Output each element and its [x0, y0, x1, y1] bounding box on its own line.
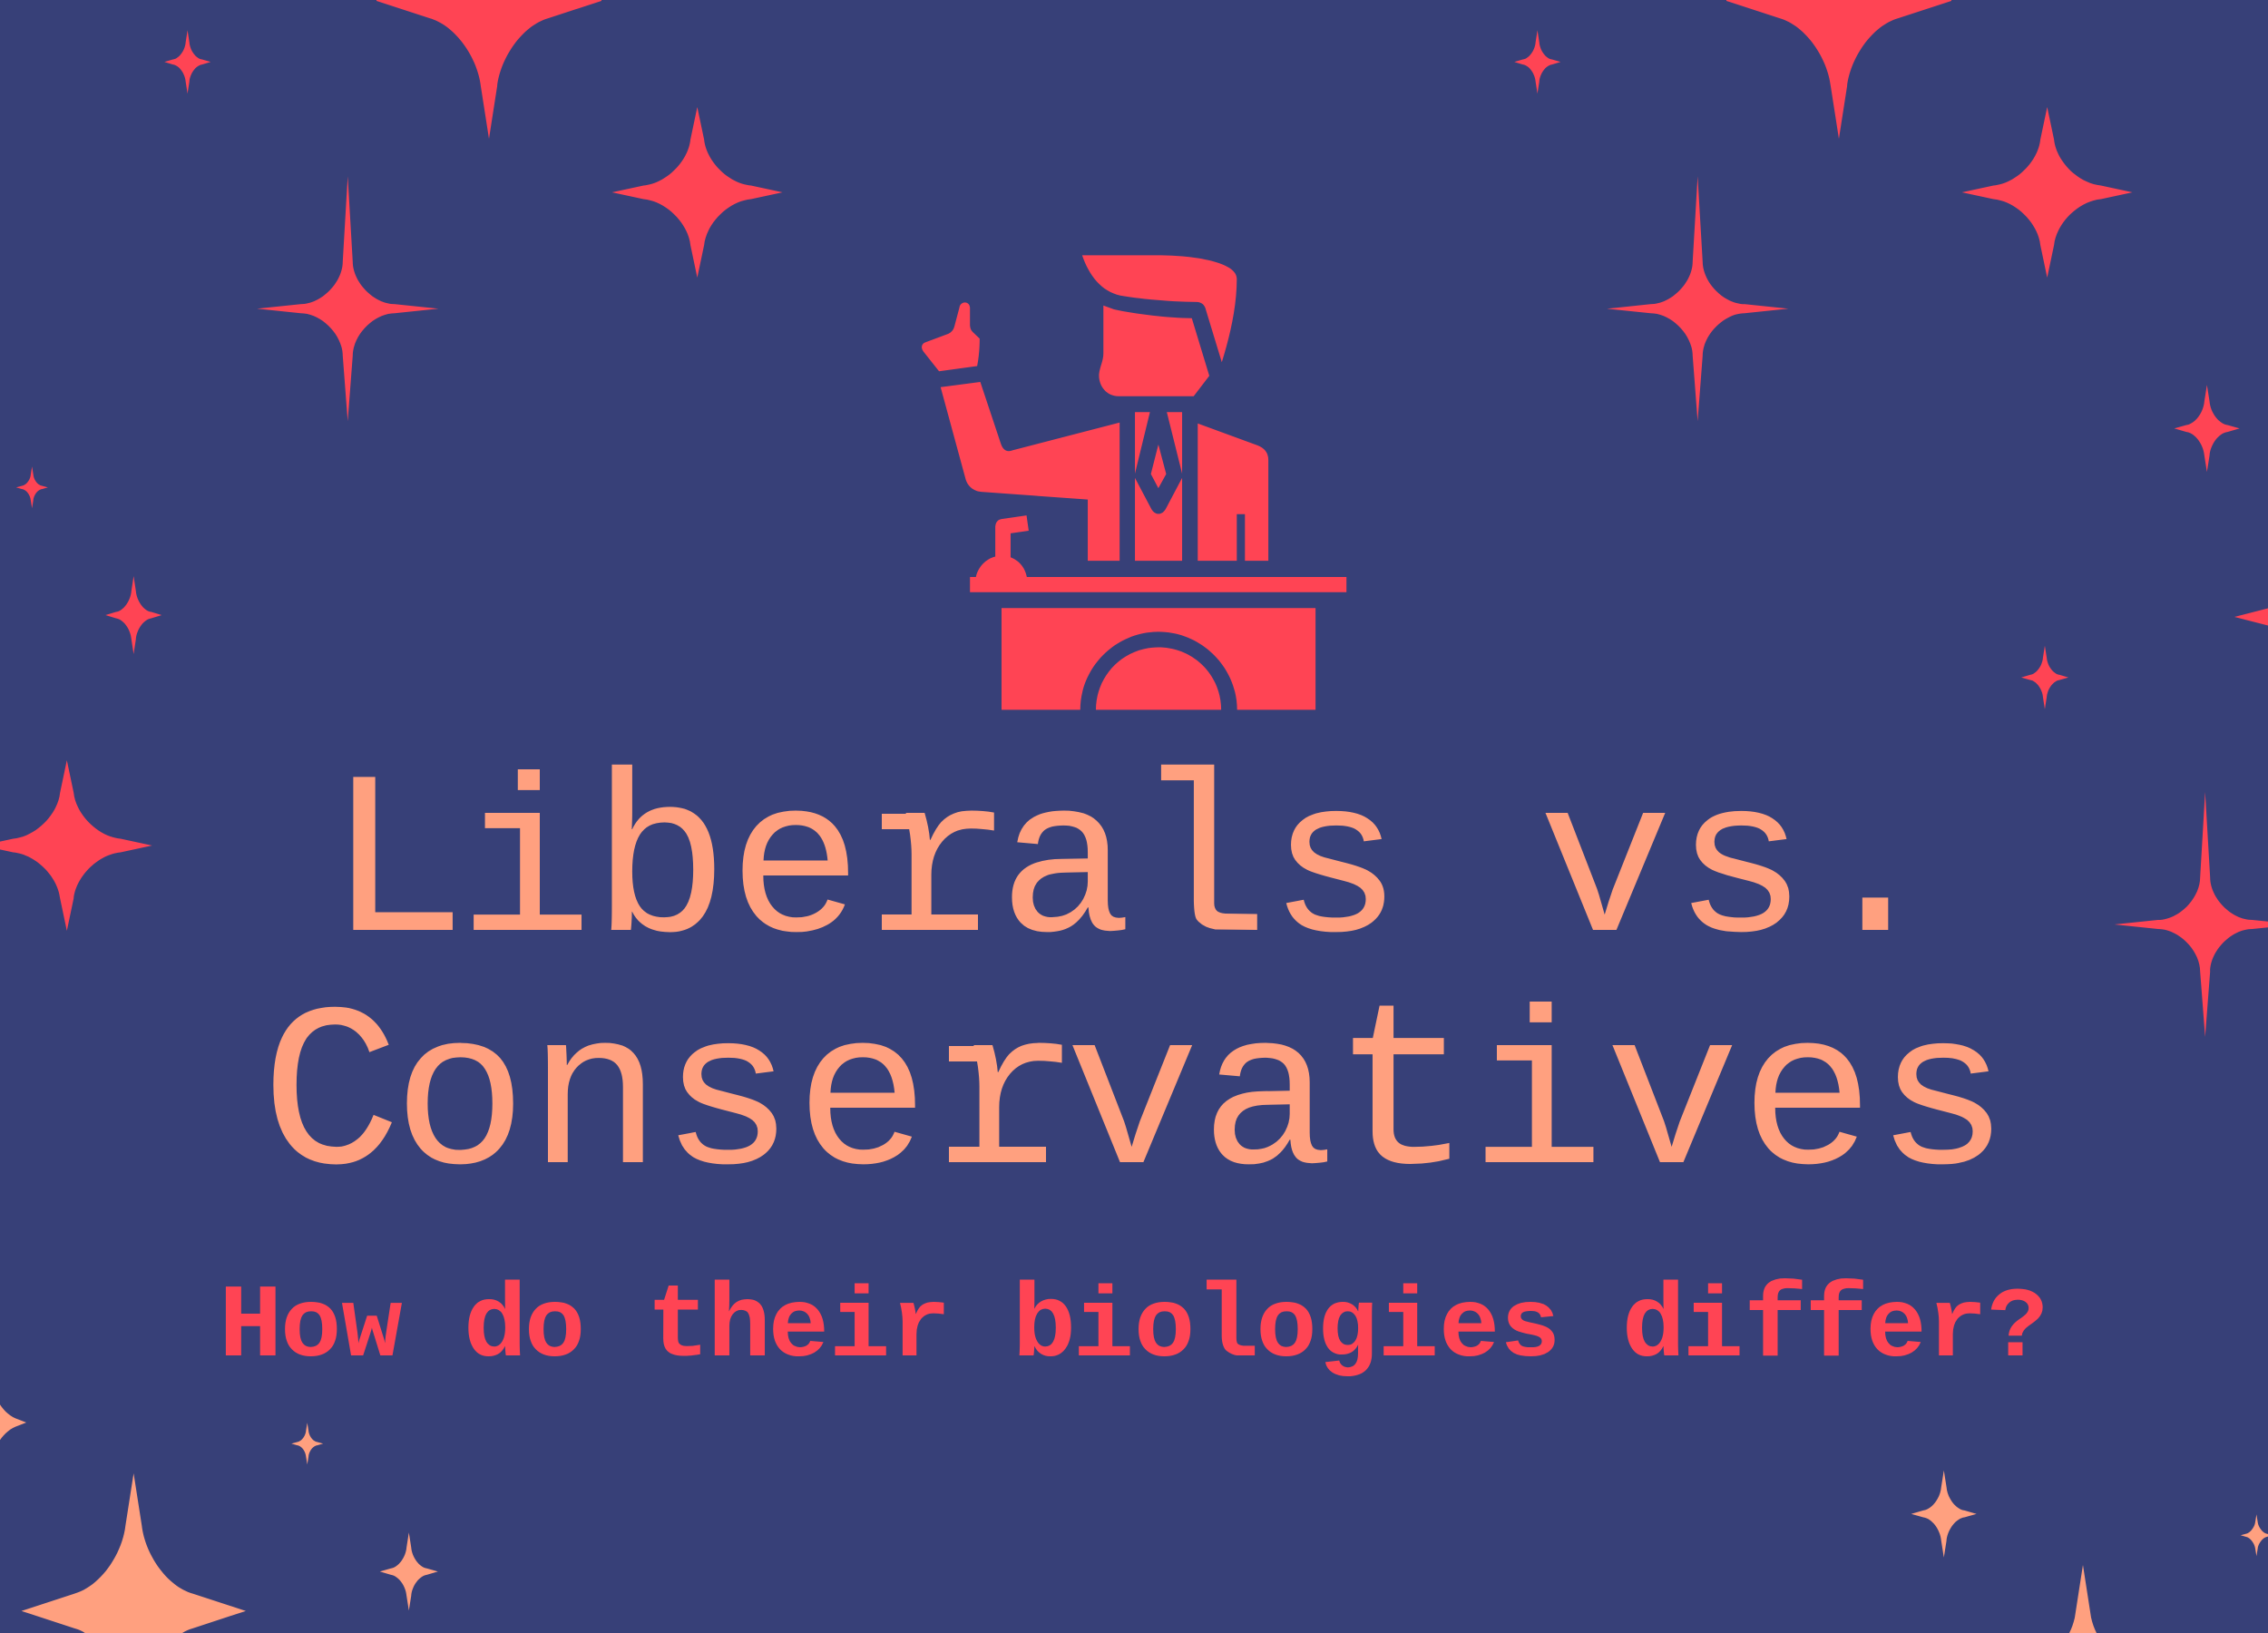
star: long-armed left	[257, 176, 438, 421]
star: clipped left edge	[0, 760, 152, 931]
icon: podium emblem	[1096, 648, 1221, 709]
icon: raised hand	[922, 302, 980, 371]
peach stars	[0, 1404, 2268, 1633]
icon: microphone and desk top	[970, 515, 1346, 592]
star: tiny bottom right	[2241, 1514, 2268, 1556]
icon: hair	[1082, 255, 1237, 362]
subtitle: How do their biologies differ?	[219, 1268, 2048, 1387]
icon: shirt and tie	[1135, 412, 1182, 561]
star: clipped right edge	[2234, 608, 2268, 626]
star: small left	[105, 576, 161, 654]
star: long-armed centre right	[1607, 176, 1788, 421]
icon: raised arm and torso	[941, 382, 1119, 561]
star: big bottom right clipped	[2069, 1565, 2097, 1633]
title line 1: Liberals vs.	[326, 738, 1943, 1000]
star: small bottom left	[380, 1532, 438, 1610]
star: small top left	[164, 30, 210, 93]
star: medium left	[612, 107, 783, 278]
icon: podium	[1002, 608, 1315, 709]
red stars	[0, 0, 2268, 1037]
star: tiny bottom left	[291, 1423, 323, 1464]
star: tiny left	[16, 466, 48, 508]
star: small bottom right	[1911, 1471, 1977, 1558]
star: small top centre	[1514, 30, 1560, 93]
star: top big right	[1726, 0, 1951, 139]
star: right upper	[2175, 385, 2240, 472]
star: right middle	[2021, 646, 2068, 709]
star: big bottom left	[22, 1473, 246, 1633]
icon: face	[1099, 306, 1209, 396]
title	[260, 738, 2009, 1233]
title line 2: Conservatives	[260, 968, 2009, 1233]
star: clipped lower left	[0, 1404, 26, 1440]
star: medium right	[1962, 107, 2133, 278]
icon: right arm	[1198, 424, 1268, 561]
icon: politician at podium	[922, 255, 1346, 709]
star: long-armed far right	[2115, 792, 2268, 1037]
star: top big left	[376, 0, 601, 139]
